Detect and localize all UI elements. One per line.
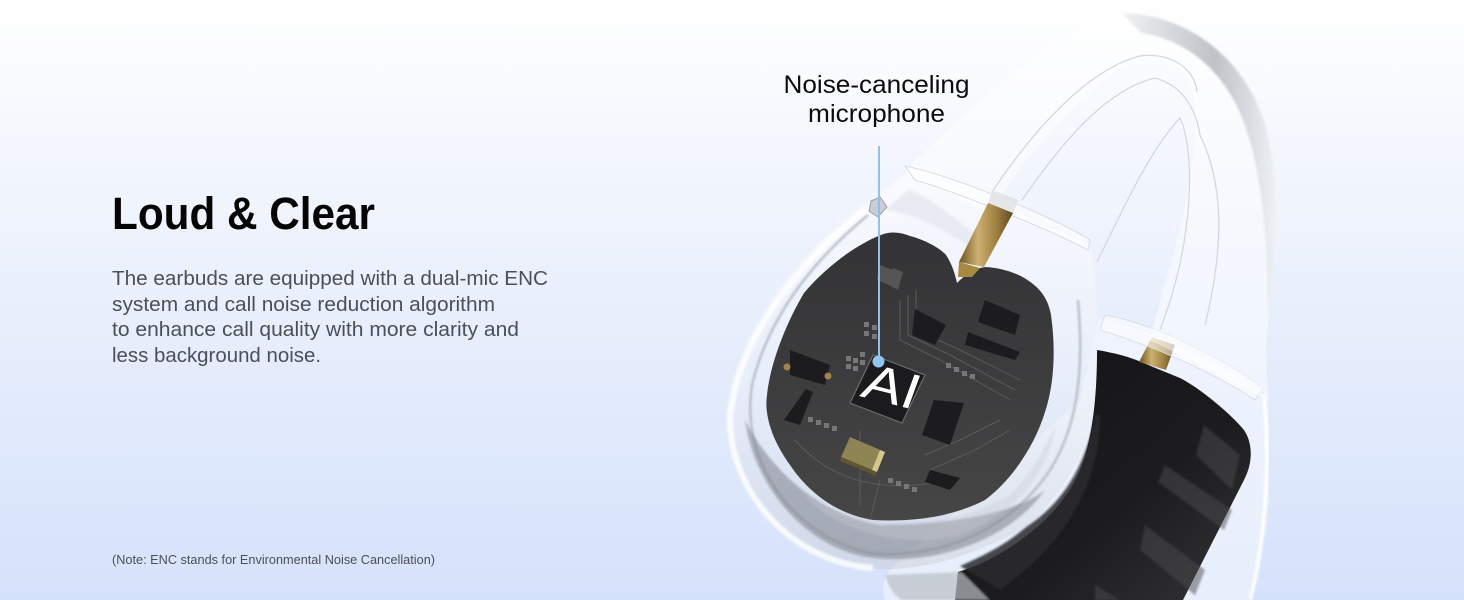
description: less background noise. xyxy=(112,344,321,367)
capacitor terminals xyxy=(784,364,832,380)
lower glass shading xyxy=(745,420,1045,559)
rear earbud glass edge xyxy=(1250,395,1267,600)
earhook stem xyxy=(905,13,1277,400)
callout label: Noise-canceling xyxy=(784,71,970,99)
front earbud xyxy=(727,166,1097,569)
callout leader line xyxy=(872,146,884,368)
small resistor clusters xyxy=(808,322,975,492)
earhook inner tube lines xyxy=(992,55,1219,330)
rear earbud xyxy=(883,315,1267,600)
rear earbud black body xyxy=(955,350,1251,600)
collar upper ring xyxy=(905,166,1090,250)
earhook clear body xyxy=(905,14,1276,400)
footnote: (Note: ENC stands for Environmental Noise Cancellation) xyxy=(112,552,435,567)
board traces xyxy=(795,290,1020,520)
AI chip xyxy=(850,354,929,423)
AI chip label: AI xyxy=(855,354,929,420)
rear earbud brass connector xyxy=(1139,337,1175,370)
title: Loud & Clear xyxy=(112,188,375,239)
front earbud glass shell xyxy=(727,168,1097,569)
circuit board xyxy=(766,232,1054,520)
callout label: microphone xyxy=(808,100,945,128)
outer glass highlight xyxy=(730,205,873,568)
rear earbud panel highlights xyxy=(1095,425,1240,600)
inner glass rim xyxy=(750,215,1080,554)
board components xyxy=(784,265,1020,490)
description: The earbuds are equipped with a dual-mic ENC xyxy=(112,267,548,290)
callout label xyxy=(784,71,970,128)
rear earbud glass shell xyxy=(883,318,1267,600)
description xyxy=(112,267,548,367)
rear earbud dark interior seen through front shell xyxy=(960,415,1100,590)
rear earbud collar xyxy=(1100,315,1263,400)
microphone port xyxy=(869,197,887,217)
earhook grey shaded band xyxy=(1122,13,1277,320)
glass overlay on board bottom edge xyxy=(800,425,1055,540)
brass connector xyxy=(958,190,1018,277)
description: system and call noise reduction algorithm xyxy=(112,293,495,316)
collar lower ring xyxy=(885,190,985,250)
description: to enhance call quality with more clarity and xyxy=(112,318,519,341)
lower glass and rear bud tip xyxy=(885,572,990,600)
gold crystal component xyxy=(840,437,885,476)
